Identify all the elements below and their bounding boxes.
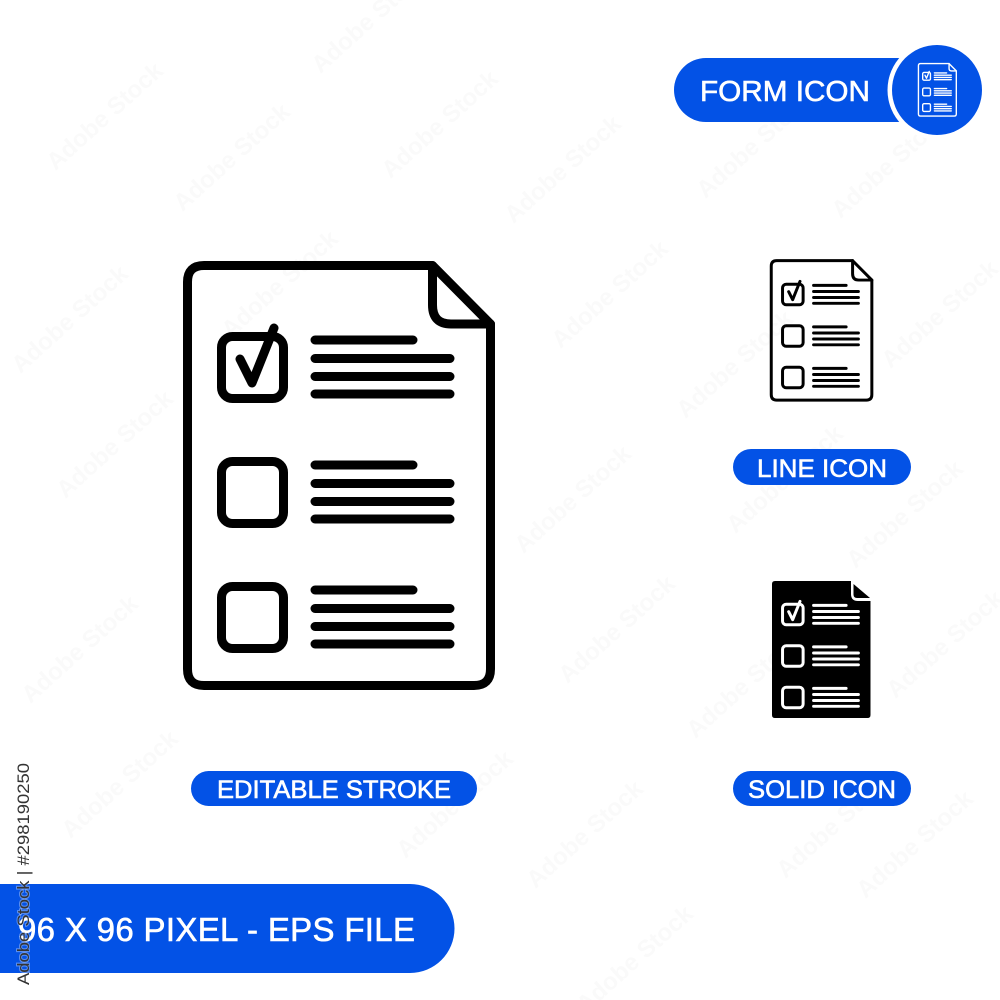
main form icon (editable stroke) [188,266,490,686]
watermark pattern: Adobe Stock [771,765,899,884]
watermark pattern: Adobe Stock [841,455,969,574]
badge label: FORM ICON [700,76,870,108]
checked box [222,328,284,398]
solid page body [772,581,870,718]
line icon [771,261,872,400]
watermark pattern: Adobe Stock [681,625,809,744]
badge pill [674,58,905,122]
watermark pattern: Adobe Stock [16,590,144,709]
watermark pattern: Adobe Stock [546,235,674,354]
label: editable stroke [191,771,477,806]
watermark pattern: Adobe Stock [521,775,649,894]
watermark pattern: Adobe Stock [56,725,184,844]
watermark pattern: Adobe Stock [6,260,134,379]
watermark pattern: Adobe Stock [499,110,627,229]
badge: form icon [674,40,986,140]
stock id vertical text: Adobe Stock | #298190250 [14,763,33,985]
solid fold triangle [854,584,870,598]
banner: pixel size and file type [0,884,454,973]
empty box row 3 [222,586,284,648]
badge circle [892,45,982,135]
watermark pattern: Adobe Stock [168,98,296,217]
small white form icon [918,64,956,116]
watermark pattern: Adobe Stock [553,570,681,689]
label: solid icon [733,771,911,806]
label: editable stroke: EDITABLE STROKE [217,776,451,804]
empty box row 2 [222,462,284,524]
white ring [888,40,986,140]
watermark pattern: Adobe Stock [876,255,1000,374]
text lines row 3 [315,590,450,644]
text lines row 1 [315,340,450,394]
solid icon [772,581,870,718]
label: line icon: LINE ICON [757,455,887,483]
watermark pattern: Adobe Stock [51,385,179,504]
watermark pattern: Adobe Stock [721,420,849,539]
folded corner [432,266,490,324]
text lines row 2 [315,465,450,519]
watermark pattern: Adobe Stock [851,785,979,904]
watermark pattern: Adobe Stock [41,57,169,176]
page outline [188,266,490,686]
banner: pixel size and file type: 96 X 96 PIXEL - EPS FILE [18,911,415,948]
watermark pattern: Adobe Stock [826,105,954,224]
watermark pattern: Adobe Stock [509,440,637,559]
watermark pattern: Adobe Stock [376,65,504,184]
watermark pattern: Adobe Stock [691,85,819,204]
watermark pattern: Adobe Stock [671,305,799,424]
watermark pattern: Adobe Stock [391,745,519,864]
solid icon white details [783,601,858,708]
watermark pattern: Adobe Stock [216,225,344,344]
label: solid icon: SOLID ICON [748,776,896,804]
label: line icon [733,449,911,485]
